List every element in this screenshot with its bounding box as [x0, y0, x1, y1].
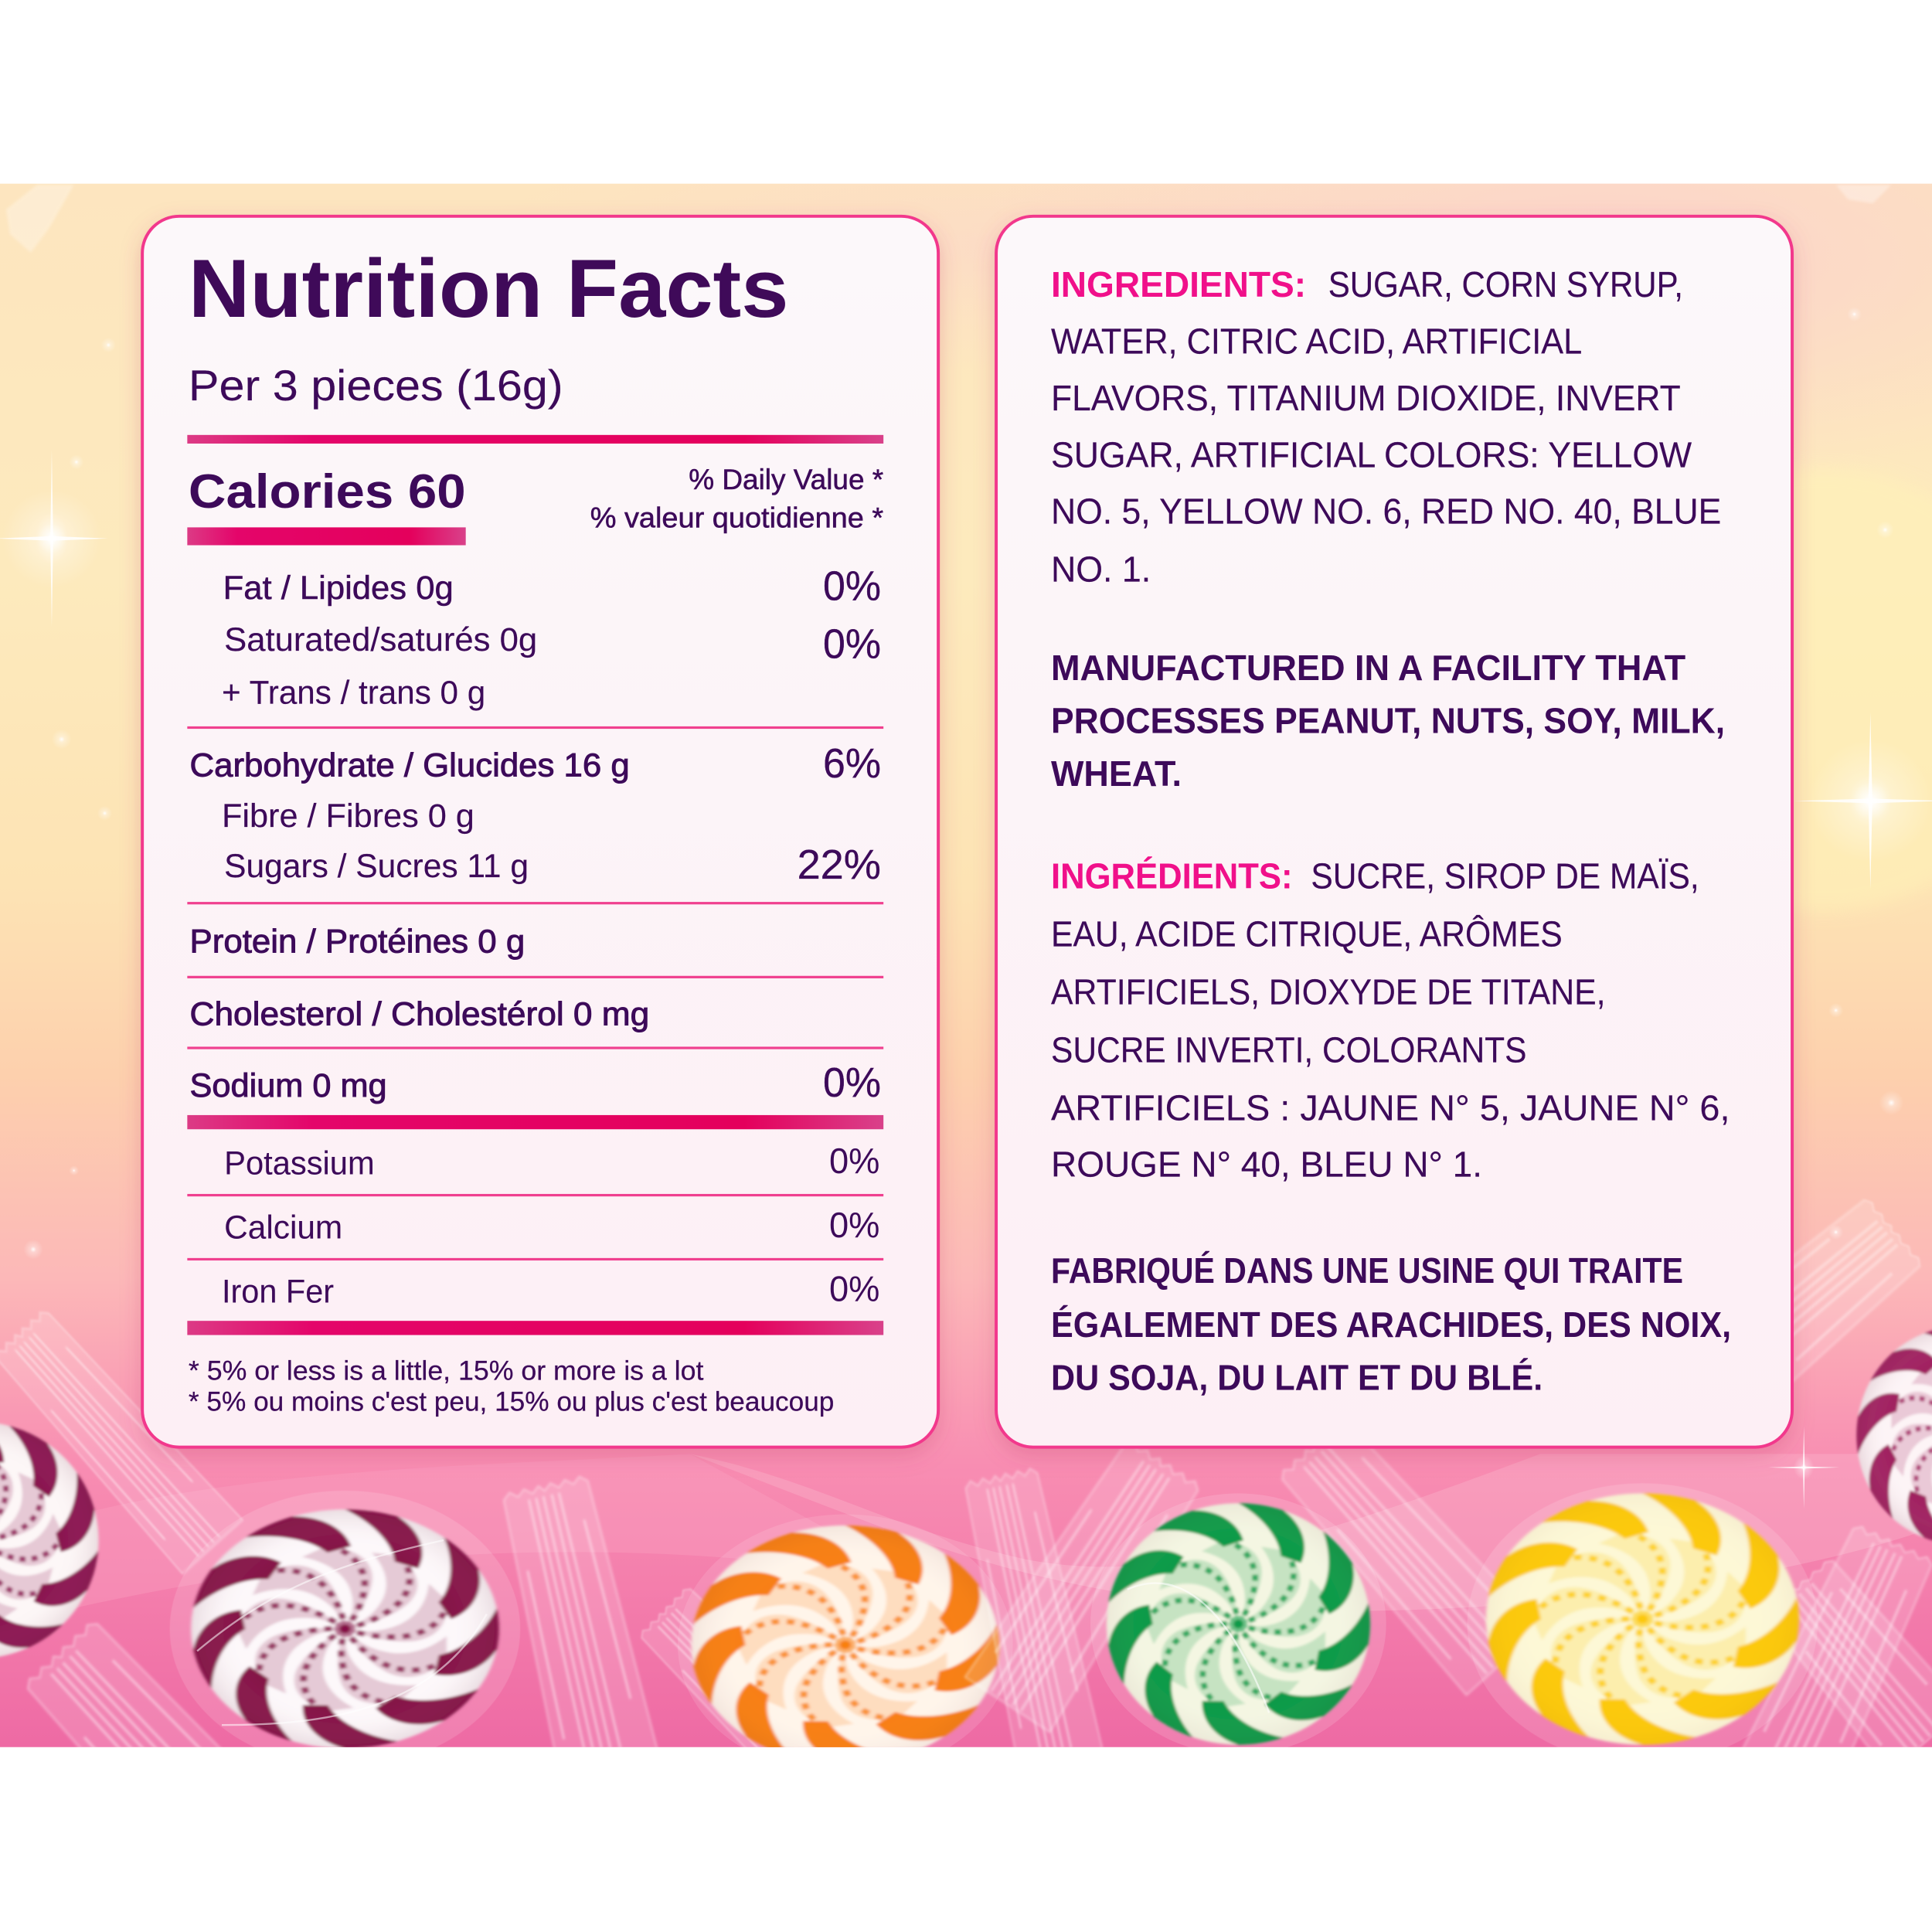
- English allergen notice: MANUFACTURED IN A FACILITY THAT: [1051, 648, 1685, 688]
- daily value header: [590, 464, 883, 533]
- fat rows: Saturated/saturés 0g: [224, 621, 537, 658]
- English ingredients: SUGAR, CORN SYRUP,: [1328, 264, 1683, 304]
- English ingredients: SUGAR, ARTIFICIAL COLORS: YELLOW: [1051, 434, 1692, 474]
- candy: green swirl: [963, 1448, 1498, 1747]
- carbohydrate rows: 6%: [823, 740, 881, 787]
- panel: ingredients: [996, 216, 1792, 1447]
- sparkles: [0, 185, 1932, 1509]
- sodium row: [190, 1060, 881, 1106]
- minerals: Calcium: [224, 1209, 342, 1246]
- English allergen notice: PROCESSES PEANUT, NUTS, SOY, MILK,: [1051, 701, 1725, 741]
- carbohydrate rows: Sugars / Sucres 11 g: [224, 848, 529, 885]
- French ingredients: ARTIFICIELS, DIOXYDE DE TITANE,: [1051, 971, 1605, 1012]
- carbohydrate rows: [190, 740, 881, 888]
- French ingredients: [1051, 856, 1730, 1185]
- title: Nutrition Facts: [189, 242, 788, 335]
- footnotes: [189, 1356, 834, 1417]
- fat rows: 0%: [823, 563, 881, 609]
- fat rows: + Trans / trans 0 g: [222, 674, 485, 711]
- fat rows: [222, 563, 881, 711]
- carbohydrate rows: Carbohydrate / Glucides 16 g: [190, 747, 630, 784]
- carbohydrate rows: 22%: [798, 842, 881, 888]
- minerals: 0%: [829, 1205, 879, 1245]
- daily value header: % valeur quotidienne *: [590, 502, 883, 533]
- English ingredients: NO. 5, YELLOW NO. 6, RED NO. 40, BLUE: [1051, 492, 1721, 532]
- English ingredients: [1051, 264, 1721, 590]
- calories: Calories 60: [189, 465, 466, 519]
- bottom divider bar: [187, 1321, 883, 1335]
- English ingredients: NO. 1.: [1051, 549, 1151, 590]
- footnotes: * 5% or less is a little, 15% or more is a lot: [189, 1356, 704, 1386]
- French ingredients: EAU, ACIDE CITRIQUE, ARÔMES: [1051, 913, 1563, 954]
- English ingredients: WATER, CITRIC ACID, ARTIFICIAL: [1051, 321, 1582, 362]
- French allergen notice: [1051, 1250, 1731, 1397]
- fat rows: Fat / Lipides 0g: [223, 570, 454, 607]
- minerals: Iron Fer: [222, 1273, 334, 1310]
- French ingredients: SUCRE, SIROP DE MAÏS,: [1311, 856, 1699, 896]
- daily value header: % Daily Value *: [689, 464, 883, 495]
- candy: yellow swirl: [1468, 1484, 1932, 1747]
- protein row: Protein / Protéines 0 g: [190, 923, 525, 960]
- sodium divider bar: [187, 1115, 883, 1129]
- French allergen notice: ÉGALEMENT DES ARACHIDES, DES NOIX,: [1051, 1304, 1731, 1345]
- calories: [187, 465, 466, 546]
- footnotes: * 5% ou moins c'est peu, 15% ou plus c'est beaucoup: [189, 1387, 834, 1417]
- French ingredients: ROUGE N° 40, BLEU N° 1.: [1051, 1145, 1482, 1185]
- candy: partial purple left: [0, 1311, 244, 1658]
- carbohydrate rows: Fibre / Fibres 0 g: [222, 798, 474, 835]
- candy: partial purple right: [1794, 1199, 1932, 1543]
- panel: nutrition facts: [142, 216, 938, 1447]
- fat rows: 0%: [823, 621, 881, 667]
- candy: purple swirl: [18, 1473, 658, 1901]
- English ingredients: INGREDIENTS:: [1051, 264, 1306, 304]
- candy: orange swirl: [640, 1515, 1012, 1747]
- English allergen notice: [1051, 648, 1725, 794]
- French ingredients: ARTIFICIELS : JAUNE N° 5, JAUNE N° 6,: [1051, 1087, 1730, 1128]
- English allergen notice: WHEAT.: [1051, 753, 1182, 794]
- serving size: Per 3 pieces (16g): [189, 361, 563, 410]
- sodium row: Sodium 0 mg: [190, 1067, 387, 1104]
- French ingredients: SUCRE INVERTI, COLORANTS: [1051, 1029, 1526, 1070]
- sodium row: 0%: [823, 1060, 881, 1106]
- minerals: [187, 1141, 883, 1310]
- top thick divider: [187, 435, 883, 444]
- English ingredients: FLAVORS, TITANIUM DIOXIDE, INVERT: [1051, 378, 1681, 418]
- minerals: 0%: [829, 1141, 879, 1181]
- French ingredients: INGRÉDIENTS:: [1051, 856, 1293, 896]
- cholesterol row: Cholesterol / Cholestérol 0 mg: [190, 996, 649, 1033]
- minerals: 0%: [829, 1269, 879, 1309]
- French allergen notice: DU SOJA, DU LAIT ET DU BLÉ.: [1051, 1357, 1543, 1397]
- French allergen notice: FABRIQUÉ DANS UNE USINE QUI TRAITE: [1051, 1250, 1683, 1291]
- minerals: Potassium: [224, 1145, 375, 1182]
